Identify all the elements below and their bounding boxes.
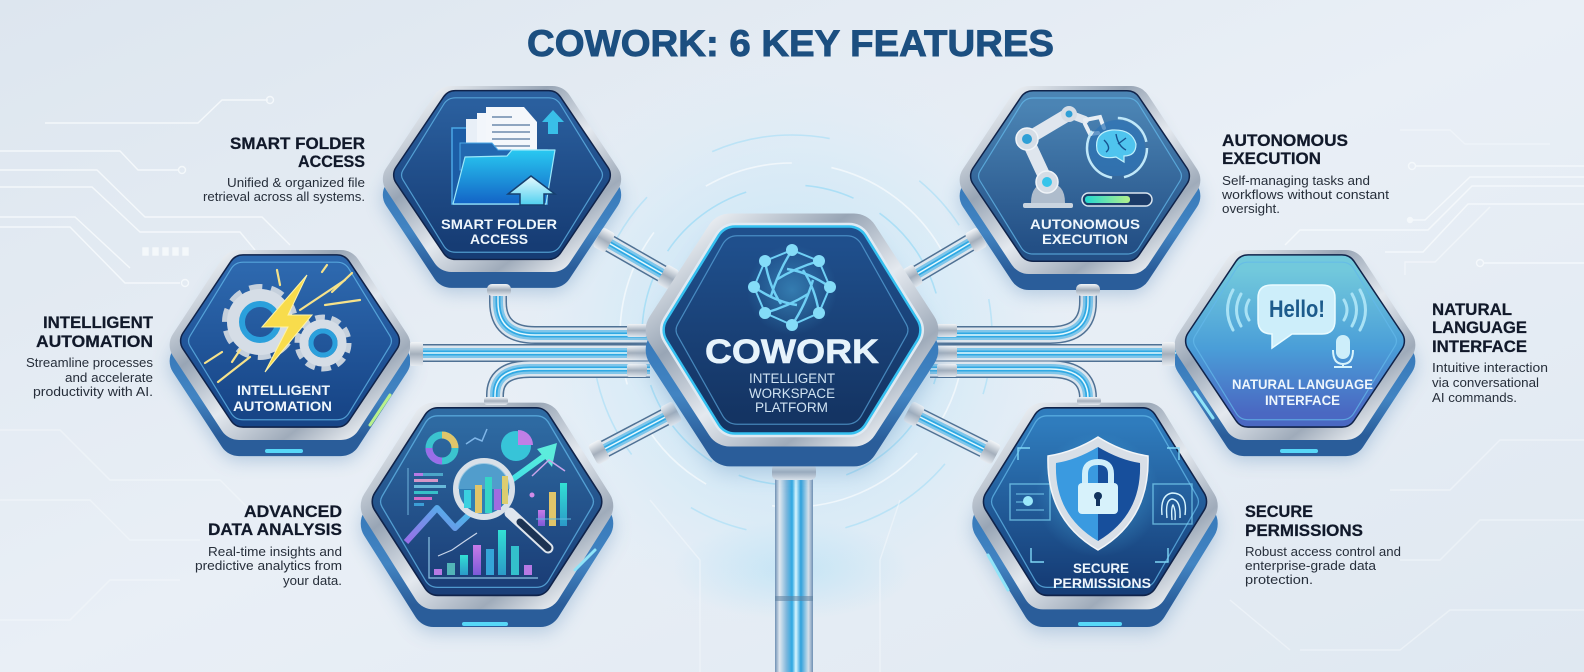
hub title: COWORK xyxy=(705,333,879,371)
hub subtitle: WORKSPACE xyxy=(749,385,835,401)
text block: intelligent automation: and accelerate xyxy=(65,370,153,385)
text block: secure permissions: SECURE xyxy=(1245,502,1313,521)
text block: advanced data analysis: DATA ANALYSIS xyxy=(208,520,342,539)
text block: natural language interface: Intuitive interaction xyxy=(1432,360,1548,375)
icon: gears and lightning xyxy=(205,265,360,382)
hub subtitle xyxy=(749,370,835,415)
icon: cowork network logo xyxy=(747,244,837,335)
text block: intelligent automation: productivity with AI. xyxy=(33,384,153,399)
text block: smart folder access: Unified & organized file xyxy=(227,175,365,190)
icon: speech bubble and microphone: Hello! xyxy=(1269,296,1325,323)
hexagon label: SECURE xyxy=(1073,560,1129,576)
hub subtitle: INTELLIGENT xyxy=(749,370,835,386)
hexagon label xyxy=(1232,376,1373,408)
central glow xyxy=(492,45,1092,645)
central hub hexagon xyxy=(670,236,914,447)
icon: charts and magnifier xyxy=(406,429,571,578)
hexagon label: AUTONOMOUS xyxy=(1030,216,1140,232)
text block: smart folder access: SMART FOLDER xyxy=(230,134,365,153)
icon: robot arm, brain and progress bar xyxy=(1016,106,1152,208)
vertical trunk pipe xyxy=(772,464,816,672)
text block: advanced data analysis: predictive analytics from xyxy=(195,558,342,573)
icon: speech bubble and microphone xyxy=(1228,285,1366,367)
hexagon: autonomous execution xyxy=(979,98,1181,274)
hexagon label: NATURAL LANGUAGE xyxy=(1232,376,1373,392)
text block: autonomous execution xyxy=(1221,131,1389,216)
text block: smart folder access xyxy=(203,134,365,204)
text block: advanced data analysis: Real-time insights and xyxy=(208,544,342,559)
text block: autonomous execution: Self-managing tasks and xyxy=(1222,173,1370,188)
text block: smart folder access: retrieval across all systems. xyxy=(203,189,365,204)
text block: advanced data analysis: your data. xyxy=(283,573,342,588)
text block: intelligent automation: Streamline processes xyxy=(26,355,154,370)
text block: intelligent automation: INTELLIGENT xyxy=(43,313,154,332)
icon: shield, lock, card and fingerprint xyxy=(1010,433,1192,562)
hexagon: smart folder access xyxy=(402,98,602,272)
hexagon label: ACCESS xyxy=(470,231,528,247)
hexagon label xyxy=(233,382,332,414)
text block: secure permissions: protection. xyxy=(1245,572,1313,587)
hexagon label: AUTOMATION xyxy=(233,398,332,414)
hexagon: natural language interface xyxy=(1194,262,1396,453)
pipe connectors xyxy=(410,227,1175,465)
text block: intelligent automation xyxy=(26,313,154,399)
text block: secure permissions: Robust access control and xyxy=(1245,544,1401,559)
text block: smart folder access: ACCESS xyxy=(298,152,365,171)
hexagon: secure permissions xyxy=(988,416,1198,626)
text block: advanced data analysis: ADVANCED xyxy=(244,502,342,521)
hub subtitle: PLATFORM xyxy=(755,399,828,415)
text block: autonomous execution: oversight. xyxy=(1222,201,1280,216)
icon: folder with documents xyxy=(452,107,564,205)
text block: natural language interface: AI commands. xyxy=(1432,390,1517,405)
connector pipes xyxy=(415,238,1180,453)
text block: secure permissions: PERMISSIONS xyxy=(1245,521,1363,540)
hexagon: intelligent automation xyxy=(189,262,391,453)
hexagon label: SMART FOLDER xyxy=(441,216,557,232)
hexagon: advanced data analysis xyxy=(381,416,595,626)
hexagon label xyxy=(1053,560,1151,591)
text block: secure permissions xyxy=(1245,502,1401,587)
title: COWORK: 6 KEY FEATURES xyxy=(527,22,1054,64)
hexagon label xyxy=(1030,216,1140,247)
text block: natural language interface: NATURAL xyxy=(1432,300,1512,319)
text block: autonomous execution: workflows without constant xyxy=(1221,187,1389,202)
text block: natural language interface: LANGUAGE xyxy=(1432,318,1527,337)
text block: natural language interface: INTERFACE xyxy=(1432,337,1527,356)
hexagon label xyxy=(441,216,557,247)
hexagon label: PERMISSIONS xyxy=(1053,575,1151,591)
text block: autonomous execution: AUTONOMOUS xyxy=(1222,131,1348,150)
text block: intelligent automation: AUTOMATION xyxy=(36,332,153,351)
hexagon label: INTELLIGENT xyxy=(237,382,330,398)
hexagon label: EXECUTION xyxy=(1042,231,1128,247)
text block: natural language interface xyxy=(1432,300,1548,405)
text block: autonomous execution: EXECUTION xyxy=(1222,149,1321,168)
hexagon label: INTERFACE xyxy=(1265,392,1340,408)
text block: natural language interface: via conversational xyxy=(1432,375,1539,390)
text block: secure permissions: enterprise-grade data xyxy=(1245,558,1377,573)
text block: advanced data analysis xyxy=(195,502,342,588)
